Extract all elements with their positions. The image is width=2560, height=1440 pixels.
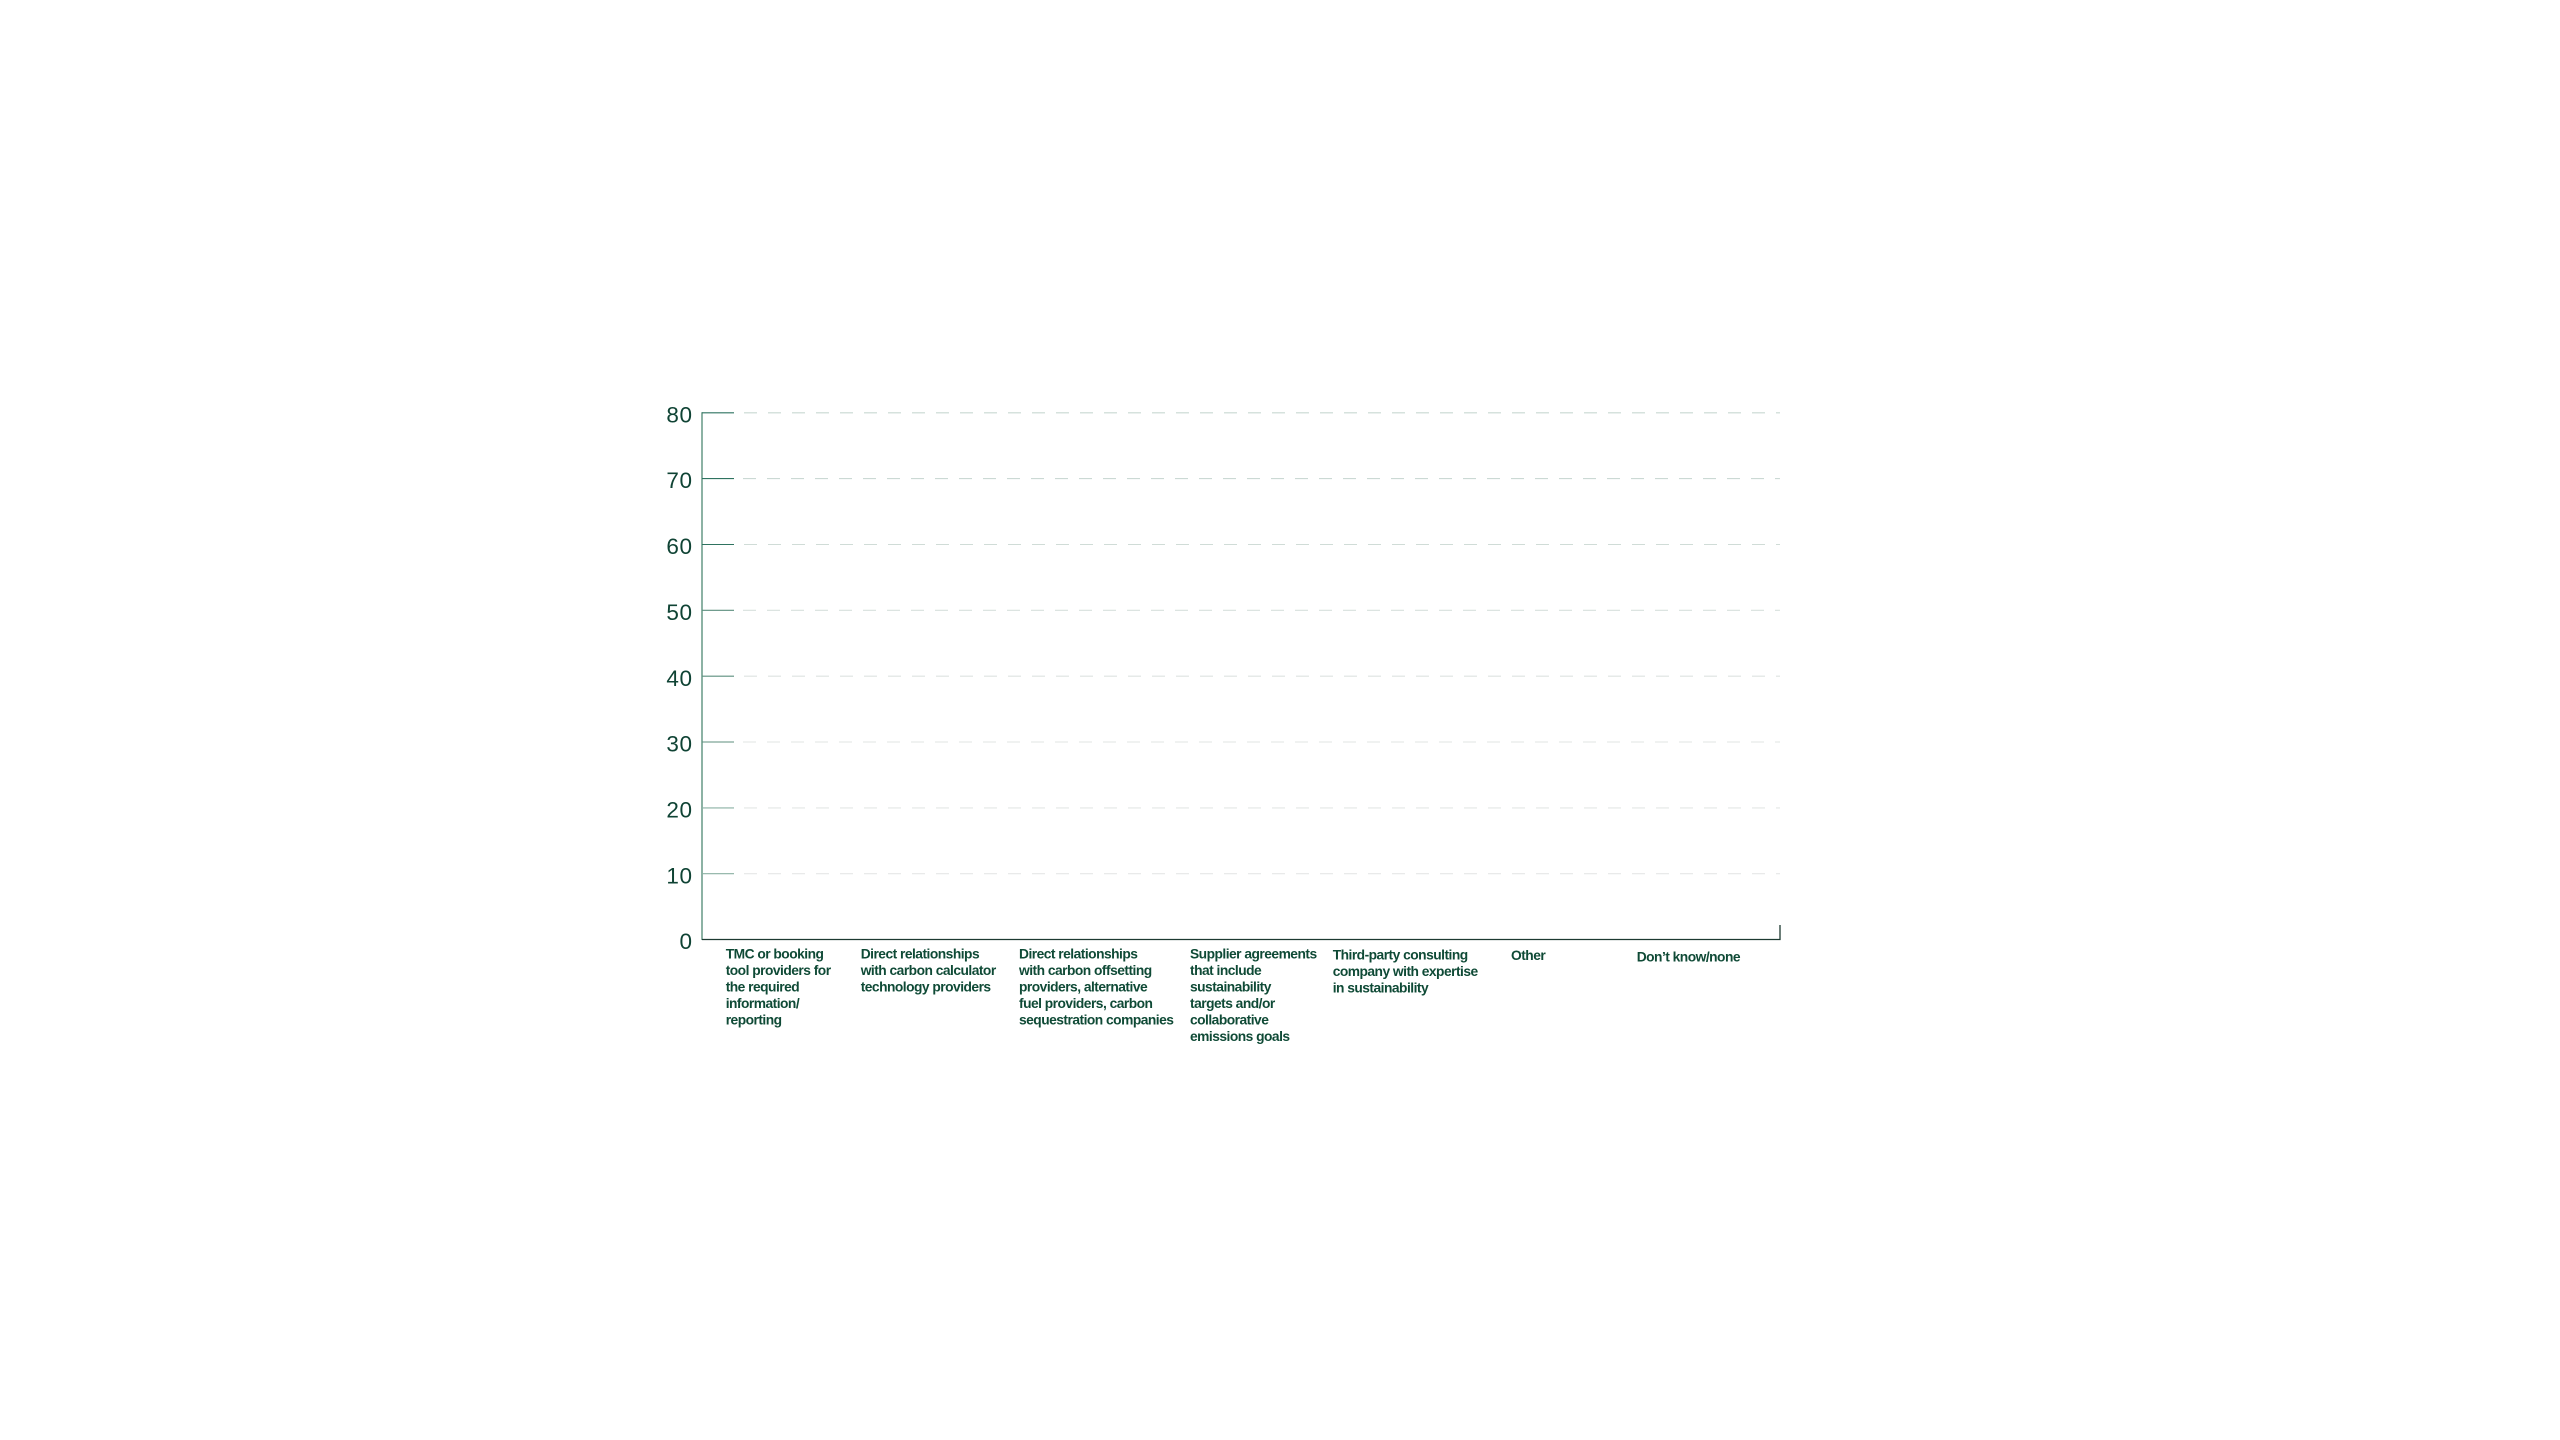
y axis value labels: 30 (666, 732, 693, 757)
category label: carbon offsetting providers: providers, alternative (1019, 980, 1148, 995)
y axis value labels: 20 (666, 798, 693, 822)
category label: third-party consulting: in sustainability (1333, 980, 1429, 995)
category label: TMC or booking tool providers: reporting (726, 1013, 782, 1028)
category label: supplier agreements: emissions goals (1190, 1029, 1290, 1044)
y axis value labels: 10 (666, 863, 693, 888)
category label: carbon offsetting providers: with carbon offsetting (1018, 963, 1152, 978)
category label: carbon offsetting providers: Direct relationships (1019, 947, 1138, 962)
category label: carbon calculator technology providers: Direct relationships (861, 947, 980, 962)
y axis value labels (666, 402, 693, 954)
x axis baseline (702, 925, 1780, 940)
y axis with ticks (702, 412, 734, 940)
category label: third-party consulting: company with expertise (1333, 964, 1479, 979)
category label: TMC or booking tool providers: the required (726, 980, 799, 995)
y axis value labels: 60 (666, 534, 693, 559)
category label: supplier agreements: sustainability (1190, 980, 1272, 995)
category label: supplier agreements: that include (1190, 963, 1262, 978)
category label: carbon offsetting providers: sequestration companies (1019, 1013, 1174, 1028)
category label: TMC or booking tool providers: TMC or booking (726, 947, 824, 962)
category label: carbon calculator technology providers: with carbon calculator (860, 963, 997, 978)
y axis value labels: 0 (679, 929, 693, 954)
category label: carbon calculator technology providers: technology providers (861, 980, 991, 995)
category label: don't know/none: Don’t know/none (1637, 949, 1741, 964)
y axis value labels: 40 (666, 666, 693, 691)
category label: carbon offsetting providers: fuel providers, carbon (1019, 996, 1153, 1011)
category label: TMC or booking tool providers: information/ (726, 996, 800, 1011)
y axis value labels: 80 (666, 402, 693, 427)
category label: other: Other (1511, 948, 1546, 963)
y axis value labels: 70 (666, 468, 693, 493)
y axis value labels: 50 (666, 600, 693, 625)
category label: third-party consulting: Third-party consulting (1333, 947, 1468, 962)
category label: supplier agreements: Supplier agreements (1190, 947, 1317, 962)
category label: supplier agreements: targets and/or (1190, 996, 1276, 1011)
category label: TMC or booking tool providers: tool providers for (726, 963, 832, 978)
category label: supplier agreements: collaborative (1190, 1013, 1269, 1028)
